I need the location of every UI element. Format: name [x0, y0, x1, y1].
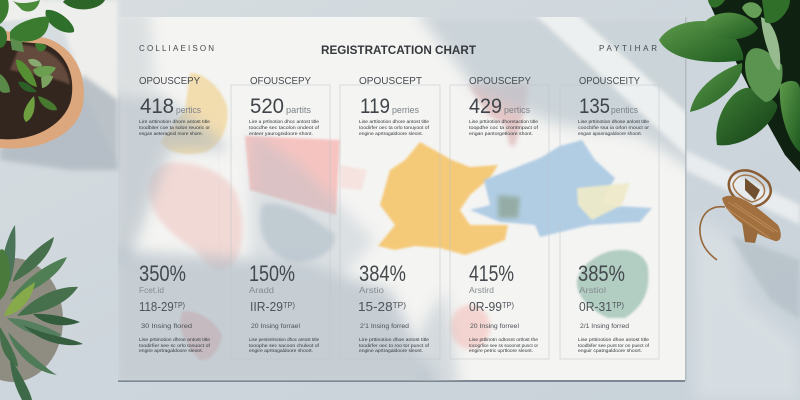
column 5: 2/1 Insing forred [580, 323, 629, 330]
card outlines [120, 85, 659, 359]
column 2: tooophe sec sacoon chuleot of [249, 343, 320, 349]
left header label: COLLIAEISON [139, 44, 214, 53]
watercolor: green strokes [577, 250, 648, 318]
twine bundle [700, 170, 800, 320]
column 1: TP) [174, 301, 185, 310]
column 1: OPOUSCEPY [139, 75, 200, 87]
column 5: engan apanragaldoore shoort. [578, 131, 642, 137]
watercolor: pink patch bottom [180, 311, 222, 360]
column 5: OPOUSCEITY [579, 75, 640, 87]
column 2: TP) [283, 301, 295, 310]
column 5: 385% [578, 261, 625, 286]
column 2: Aradd [249, 286, 274, 295]
watercolor: pale yellow shard [577, 183, 630, 220]
watercolor: yellow blob top left [160, 73, 228, 154]
column 1: Fcet.id [139, 286, 164, 295]
column 5: enguir cpatngaldoore shoort. [578, 348, 642, 354]
column 5: 0R-31 [579, 299, 614, 314]
column 3: Lise arttinotion dhore antost title [359, 119, 429, 125]
column 3: toodirfer oec ta orlo tonuyoot of [359, 125, 430, 131]
column 3: Lire prttinotion dhoe antost title [359, 337, 429, 343]
watercolor: grey smudge [260, 204, 335, 262]
column 5: toodbifer see punt tor on puect of [578, 343, 650, 349]
column 5: Lise prttinotion dhose anlost title [578, 119, 649, 125]
column 5: Arstiol [579, 286, 606, 295]
column 4: TP) [502, 301, 514, 310]
plant: spiky potted top view [0, 225, 83, 400]
watercolor: pale pink square [340, 165, 367, 190]
column 2: partits [286, 105, 312, 115]
column 3 [358, 75, 430, 354]
column 4: pertics [504, 105, 530, 115]
column 4: toopdhe coc ta crontmpact of [469, 125, 539, 131]
column 1 [139, 75, 211, 354]
column 3: 2'1 Insing forred [360, 323, 409, 330]
column 5: Lise prttinotion dhoe antost title [578, 337, 649, 343]
column 4: tocogrfice see ss sooonot punct or [469, 343, 538, 349]
column 5: pentics [611, 105, 638, 115]
column 1: 118-29 [139, 299, 179, 314]
column 3: engine aprtragaldoore sleont. [359, 348, 423, 354]
column 4: 20 Insing forreel [470, 323, 520, 330]
column 3: toodirfer oec to roo tor punct of [359, 343, 430, 349]
column 1: toodbiter coe ta solon reuoric or [139, 125, 210, 131]
column 4 [469, 75, 539, 354]
column 1: toodirfier see sc orlo tonuoct of [139, 343, 211, 349]
column 2: toocdhe sec tacolon ondeot of [249, 125, 320, 131]
right header label: PAYTIHAR [599, 44, 657, 53]
column 4: engan pantorgetloore shont. [469, 131, 533, 137]
column 2: engire aprtragaldoore shoort. [249, 348, 313, 354]
paper sheet [118, 17, 686, 382]
column 2: 20 Insing forrael [251, 323, 301, 330]
column 1: 350% [139, 261, 186, 286]
column 3: perries [392, 105, 419, 115]
column 1: 30 Insing flored [141, 323, 192, 330]
column 1: Lire arttinotion dhore antost title [139, 119, 210, 125]
column 3: 384% [359, 261, 406, 286]
column 5: 135 [579, 95, 610, 118]
column 2: 520 [250, 95, 284, 118]
column 2: enteer yaurognidoore shont. [249, 131, 313, 137]
column 5: coocbifie ssa ia orlon mouct or [578, 125, 649, 131]
column 2: 150% [249, 261, 295, 286]
watercolor: olive overlap [498, 195, 520, 218]
column 1: pertics [176, 105, 201, 115]
column 2: Lire a prtlnotion dhoc antost title [249, 119, 319, 125]
watercolor: pink blob left [148, 162, 242, 270]
watercolor: pink patch lower middle [450, 305, 490, 349]
column 4: 0R-99 [469, 299, 504, 314]
column 3: OPOUSCEPT [359, 75, 423, 87]
column 4: OPOUSCEPY [469, 75, 531, 87]
column 2: IIR-29 [250, 299, 285, 314]
column 1: Lise prttinotion dhroe antost title [139, 337, 210, 343]
column 3: 119 [360, 95, 390, 118]
sunlight and leaf shadows on paper [110, 10, 700, 390]
column 4: 429 [469, 95, 502, 118]
watercolor: mauve top [468, 84, 528, 146]
column 2 [249, 75, 320, 354]
column 3: engine aprtragaldoore sleont. [359, 131, 423, 137]
column 1: engan aeteragnid more shore. [139, 131, 203, 137]
column 3: TP) [393, 301, 406, 310]
column 3: 15-28 [358, 299, 391, 314]
column 5 [578, 75, 650, 354]
title: REGISTRATCATION CHART [321, 45, 476, 57]
column 4: Lise prttirotion dhoretaction title [469, 119, 538, 125]
column 4: engire petric uprtloore sleont. [469, 348, 533, 354]
column 4: 415% [469, 261, 514, 286]
column 2: OFOUSCEPY [250, 75, 311, 87]
plant: pot top left [0, 0, 118, 170]
column 4: Lise pttlinotn odtosnt ortlost the [469, 337, 538, 343]
column 1: engire aprtragaldoore sleont. [139, 348, 203, 354]
column 1: 418 [140, 95, 174, 118]
plant: large leaves top right [659, 0, 800, 172]
column 2: Lise pentirelnotion dhoc antost title [249, 337, 319, 343]
column 5: TP) [612, 301, 624, 310]
watercolor: blue brush strokes [470, 140, 652, 237]
column 4: Arstird [469, 286, 494, 295]
column 3: Arstio [359, 286, 385, 295]
watercolor: yellow splash [378, 142, 508, 255]
watercolor: pink rectangle [245, 136, 340, 215]
